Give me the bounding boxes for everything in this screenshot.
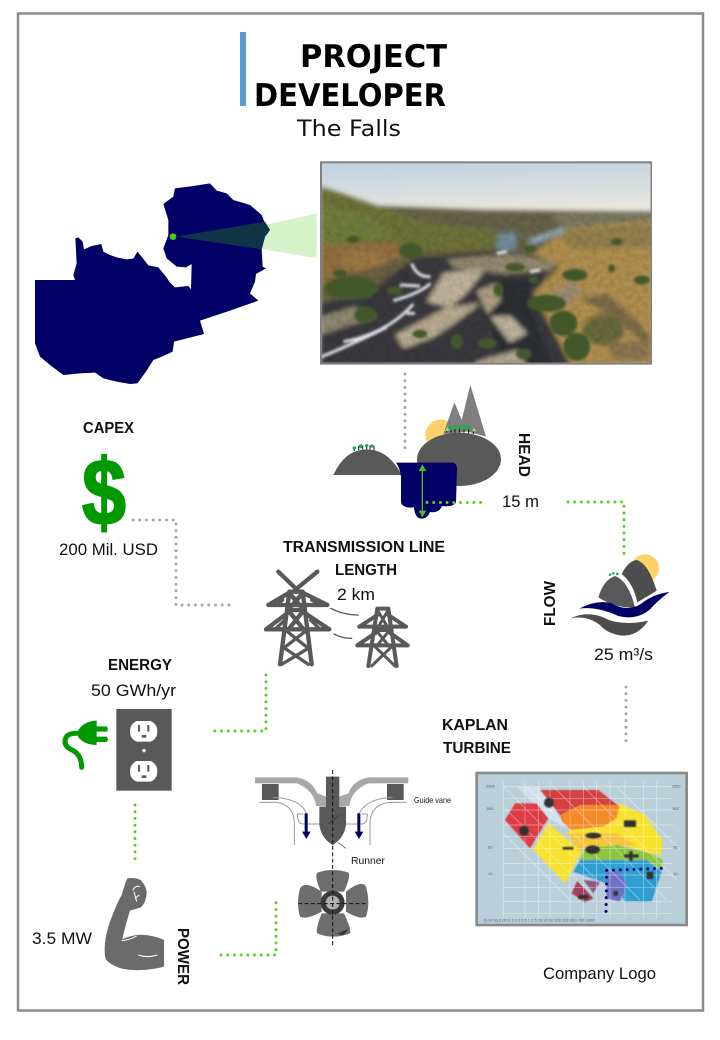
turbine selection chart xyxy=(477,773,687,925)
wires xyxy=(331,608,358,638)
bottom axis: Q (m³/s) 0.05 0.1 0.2 0.5 1 2 5 10 20 50 100 200 500 700 1000 xyxy=(483,918,595,923)
left axis low: 10 xyxy=(488,871,493,876)
shaft and hub xyxy=(319,777,346,845)
transmission line heading xyxy=(283,539,445,604)
front hill xyxy=(598,576,635,607)
view beam xyxy=(253,213,317,258)
dotted connector: head to value xyxy=(427,501,484,504)
waterfall xyxy=(396,463,457,519)
left hill xyxy=(333,449,402,475)
guide vanes xyxy=(262,784,404,800)
left axis numbers: 2000 xyxy=(486,784,496,789)
plate xyxy=(116,709,172,791)
tree tops right xyxy=(449,425,471,430)
subtitle: The Falls xyxy=(296,116,401,142)
heading line 2: LENGTH xyxy=(335,562,397,579)
beam over country xyxy=(176,222,270,249)
right axis mid: 50 xyxy=(673,844,679,849)
pointer xyxy=(328,815,346,848)
trees right xyxy=(447,427,473,434)
rotation arrow xyxy=(337,929,349,935)
rotated label: flow: FLOW xyxy=(542,580,559,626)
dotted connector: capex to transmission xyxy=(133,520,232,605)
grey wave xyxy=(571,614,648,636)
plug head xyxy=(78,721,97,745)
trees xyxy=(609,572,619,576)
icon: wall outlet xyxy=(116,709,172,791)
trees left xyxy=(354,445,374,451)
center screw xyxy=(142,749,146,752)
kaplan turbine diagram xyxy=(255,770,408,947)
prongs xyxy=(95,726,108,742)
title line 2: DEVELOPER xyxy=(254,78,446,114)
navy wave xyxy=(579,592,669,617)
energy label: ENERGY xyxy=(108,657,172,674)
title line 1: PROJECT xyxy=(300,39,447,75)
hub xyxy=(321,891,345,915)
mountains xyxy=(443,385,486,437)
arm silhouette xyxy=(105,878,164,970)
power value: 3.5 MW xyxy=(32,930,92,948)
capex value: 200 Mil. USD xyxy=(59,541,158,559)
back mountain xyxy=(622,560,657,602)
capex label: CAPEX xyxy=(83,420,134,437)
heading line 1: TRANSMISSION LINE xyxy=(283,539,445,556)
right axis numbers: 2000 xyxy=(672,784,681,789)
dotted connector: head to flow xyxy=(568,502,624,557)
tree tops left xyxy=(353,444,374,450)
chart regions xyxy=(483,782,681,923)
head icon xyxy=(333,385,501,519)
left axis mid: 50 xyxy=(488,844,493,849)
accent bar xyxy=(240,32,246,106)
icon: dollar sign: $ xyxy=(82,440,126,545)
socket slots xyxy=(138,725,149,778)
cable xyxy=(65,733,82,767)
aerial river scene xyxy=(320,163,653,367)
dotted connector: energy to power xyxy=(134,805,136,860)
icon: plug xyxy=(65,721,108,767)
arrows xyxy=(302,813,363,839)
rotated label: power: POWER xyxy=(174,928,191,985)
company logo placeholder: Company Logo xyxy=(543,965,656,983)
guide vane label: Guide vane xyxy=(414,795,451,805)
muscle lines xyxy=(122,886,157,957)
chart grid xyxy=(502,782,680,918)
head value: 15 m xyxy=(502,493,539,511)
dotted connector: transmission to energy xyxy=(209,675,266,731)
kaplan turbine label xyxy=(442,717,511,757)
sun xyxy=(425,420,456,450)
dotted connector: flow to turbine chart xyxy=(624,687,628,742)
right hill xyxy=(417,433,501,486)
energy value: 50 GWh/yr xyxy=(91,682,177,700)
flow icon xyxy=(571,554,669,636)
right axis scale: 500 xyxy=(672,806,680,811)
icon: flexed arm xyxy=(105,878,164,970)
icon: transmission towers xyxy=(266,572,408,666)
dotted connector: photo to head xyxy=(404,374,406,450)
tree crowns right xyxy=(445,427,476,431)
transmission value: 2 km xyxy=(337,586,375,604)
photo border xyxy=(321,162,651,364)
socket bottom xyxy=(130,761,157,782)
title block xyxy=(240,32,447,142)
map of Zambia with location beam xyxy=(35,183,317,384)
casing roof xyxy=(255,777,408,806)
left axis scale: 500 xyxy=(487,806,494,811)
operating point xyxy=(606,868,664,914)
axes xyxy=(298,770,367,947)
line 2: TURBINE xyxy=(443,740,511,757)
line 1: KAPLAN xyxy=(442,717,508,734)
large tower xyxy=(266,572,329,664)
casing lines xyxy=(259,797,407,845)
small tower xyxy=(357,609,408,666)
sun xyxy=(631,554,659,582)
runner label: Runner xyxy=(351,855,385,867)
chart frame xyxy=(477,773,687,925)
site marker xyxy=(170,233,176,240)
right axis low: 10 xyxy=(673,871,679,876)
hub center xyxy=(326,896,340,910)
dotted connector: power to turbine xyxy=(221,898,276,955)
flow value: 25 m³/s xyxy=(594,646,653,664)
fan blades xyxy=(298,870,368,937)
turbine symbols xyxy=(519,798,653,899)
rotated label: head: HEAD xyxy=(515,433,532,477)
socket top xyxy=(130,721,157,742)
country silhouette xyxy=(35,183,270,384)
height arrow xyxy=(419,464,426,517)
site photo xyxy=(320,162,653,367)
